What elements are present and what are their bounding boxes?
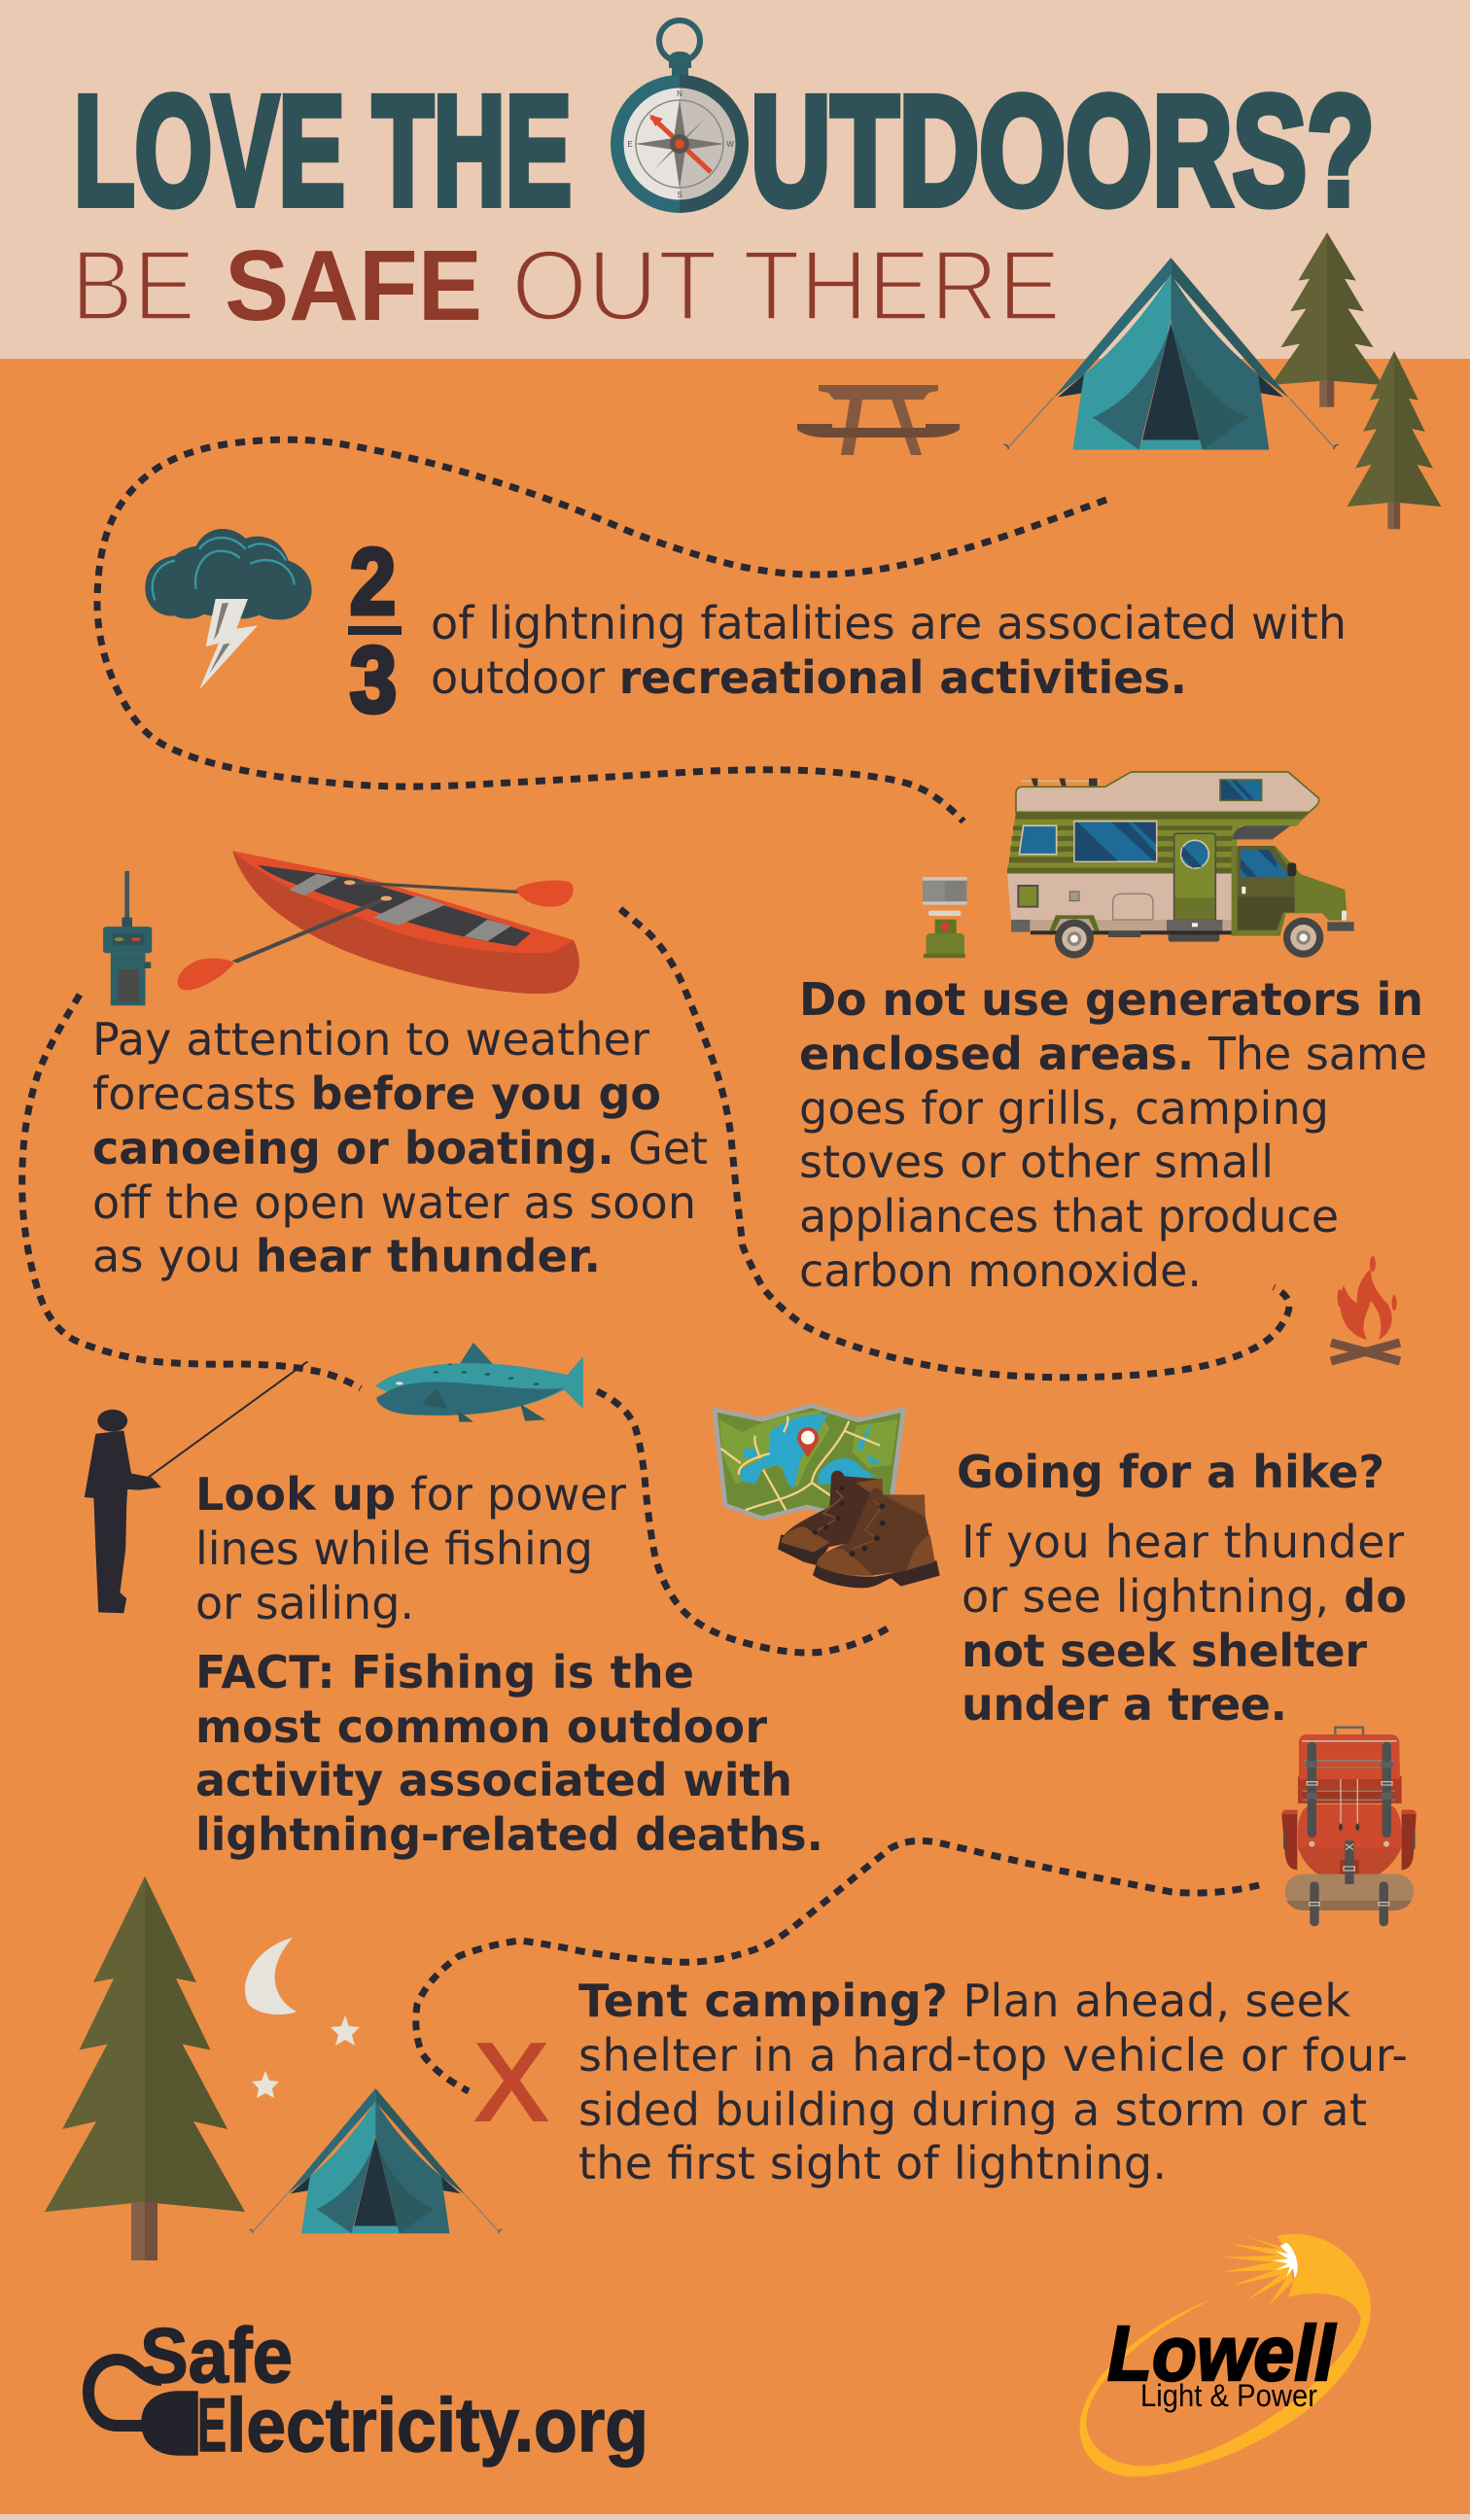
title: Love the Outdoors? xyxy=(74,63,1375,237)
icon: large tent xyxy=(1004,258,1339,450)
panel text: look up for power lines: or sailing. xyxy=(195,1577,414,1629)
panel text: fishing fact: lightning-related deaths. xyxy=(195,1808,823,1861)
subtitle: Be safe out there: OUT xyxy=(511,229,718,341)
panel text: weather forecasts: canoeing or boating. Get xyxy=(92,1122,708,1174)
dashed trail: radio to fish xyxy=(22,995,361,1388)
logo: SafeElectricity.org: E xyxy=(197,2382,227,2468)
logo: SafeElectricity.org xyxy=(88,2312,648,2468)
icon: trail map xyxy=(715,1406,903,1519)
icon: walkie talkie radio xyxy=(103,871,152,1005)
icon: canoe with paddles xyxy=(177,851,579,994)
icon: storm cloud with lightning xyxy=(145,529,312,689)
title: Love the Outdoors?: LOVE THE xyxy=(74,63,572,237)
panel text: generators xyxy=(799,973,1427,1297)
icon: crescent moon xyxy=(245,1938,297,2014)
mark: red X: X xyxy=(475,2022,547,2143)
icon: pine tree large xyxy=(45,1876,245,2260)
fraction: two thirds xyxy=(348,530,402,732)
subtitle: Be safe out there: BE xyxy=(71,229,195,341)
icon: campfire xyxy=(1331,1256,1400,1361)
panel text: tent camping: shelter in a hard-top vehicle or four- xyxy=(578,2029,1408,2082)
dashed trail: backpack to X xyxy=(416,1840,1259,2091)
logo: Lowell Light and Power: Lowell xyxy=(1107,2310,1337,2397)
panel text: weather forecasts: Pay attention to weather xyxy=(92,1013,649,1066)
panel text: generators: enclosed areas. The same xyxy=(799,1028,1427,1080)
panel text: hike advice: not seek shelter xyxy=(962,1625,1367,1677)
logo: Lowell Light and Power: Light & Power xyxy=(1140,2378,1317,2413)
panel text: hike advice xyxy=(962,1516,1407,1731)
panel text: generators: carbon monoxide. xyxy=(799,1244,1202,1297)
logo: Lowell Light and Power xyxy=(1080,2234,1371,2476)
panel text: tent camping: the first sight of lightning. xyxy=(578,2137,1167,2189)
text: lightning fatalities: of lightning fatalities are associated with xyxy=(431,597,1347,649)
panel text: weather forecasts xyxy=(92,1013,708,1282)
icon: compass: E xyxy=(627,140,633,149)
panel text: generators: goes for grills, camping xyxy=(799,1082,1329,1135)
panel text: hike advice: under a tree. xyxy=(962,1678,1287,1731)
panel text: going for a hike heading: Going for a hike? xyxy=(957,1446,1384,1498)
dashed trail: tent to RV xyxy=(97,439,1106,822)
panel text: tent camping: Tent camping? Plan ahead, seek xyxy=(578,1975,1350,2027)
text: recreational activities: outdoor recreational activities. xyxy=(431,651,1187,704)
subtitle: Be safe out there: SAFE xyxy=(225,229,482,341)
icon: backpack xyxy=(1281,1728,1417,1926)
panel text: look up for power lines xyxy=(195,1468,626,1629)
fraction: two thirds: 3 xyxy=(350,628,397,732)
fraction: two thirds: 2 xyxy=(350,530,396,634)
bottom strip xyxy=(0,2514,1470,2520)
icon: compass: W xyxy=(726,140,734,149)
panel text: generators: appliances that produce xyxy=(799,1190,1339,1242)
logo: SafeElectricity.org: Safe xyxy=(140,2312,293,2398)
panel text: fishing fact xyxy=(195,1646,823,1861)
panel text: fishing fact: activity associated with xyxy=(195,1754,792,1806)
icon: fisherman silhouette xyxy=(85,1361,307,1613)
icon: compass: N xyxy=(677,89,682,98)
panel text: generators: Do not use generators in xyxy=(799,973,1423,1026)
icon: compass xyxy=(611,20,749,213)
icon: pine tree front xyxy=(1348,351,1441,529)
dashed trail: fish to boots xyxy=(597,1391,891,1653)
panel text: generators: stoves or other small xyxy=(799,1136,1274,1188)
panel text: tent camping xyxy=(578,1975,1408,2189)
icon: hiking boots xyxy=(778,1471,940,1588)
dashed trail: canoe to campfire xyxy=(620,909,1289,1378)
icon: small tent xyxy=(250,2088,502,2233)
panel text: hike advice: If you hear thunder xyxy=(962,1516,1404,1568)
logo: SafeElectricity.org: lectricity.org xyxy=(227,2382,648,2468)
panel text: weather forecasts: as you hear thunder. xyxy=(92,1230,601,1282)
header band xyxy=(0,0,1470,359)
panel text: fishing fact: most common outdoor xyxy=(195,1700,767,1753)
icon: fish xyxy=(375,1343,583,1421)
subtitle: Be safe out there: THERE xyxy=(743,229,1061,341)
panel text: look up for power lines: Look up for power xyxy=(195,1468,626,1521)
panel text: fishing fact: FACT: Fishing is the xyxy=(195,1646,694,1698)
panel text: hike advice: or see lightning, do xyxy=(962,1570,1407,1623)
panel text: weather forecasts: off the open water as soon xyxy=(92,1176,696,1229)
icon: compass: S xyxy=(677,191,682,199)
icon: camping stove generator xyxy=(923,877,967,958)
icon: pine tree back xyxy=(1271,232,1383,407)
icon: camper RV xyxy=(1007,772,1354,959)
icon: star lower xyxy=(252,2071,279,2098)
panel text: weather forecasts: forecasts before you go xyxy=(92,1068,661,1120)
panel text: tent camping: sided building during a storm or at xyxy=(578,2083,1367,2136)
subtitle: Be safe out there xyxy=(71,229,1061,341)
icon: star upper xyxy=(331,2015,360,2046)
panel text: look up for power lines: lines while fishing xyxy=(195,1522,593,1575)
icon: picnic table xyxy=(797,385,960,455)
